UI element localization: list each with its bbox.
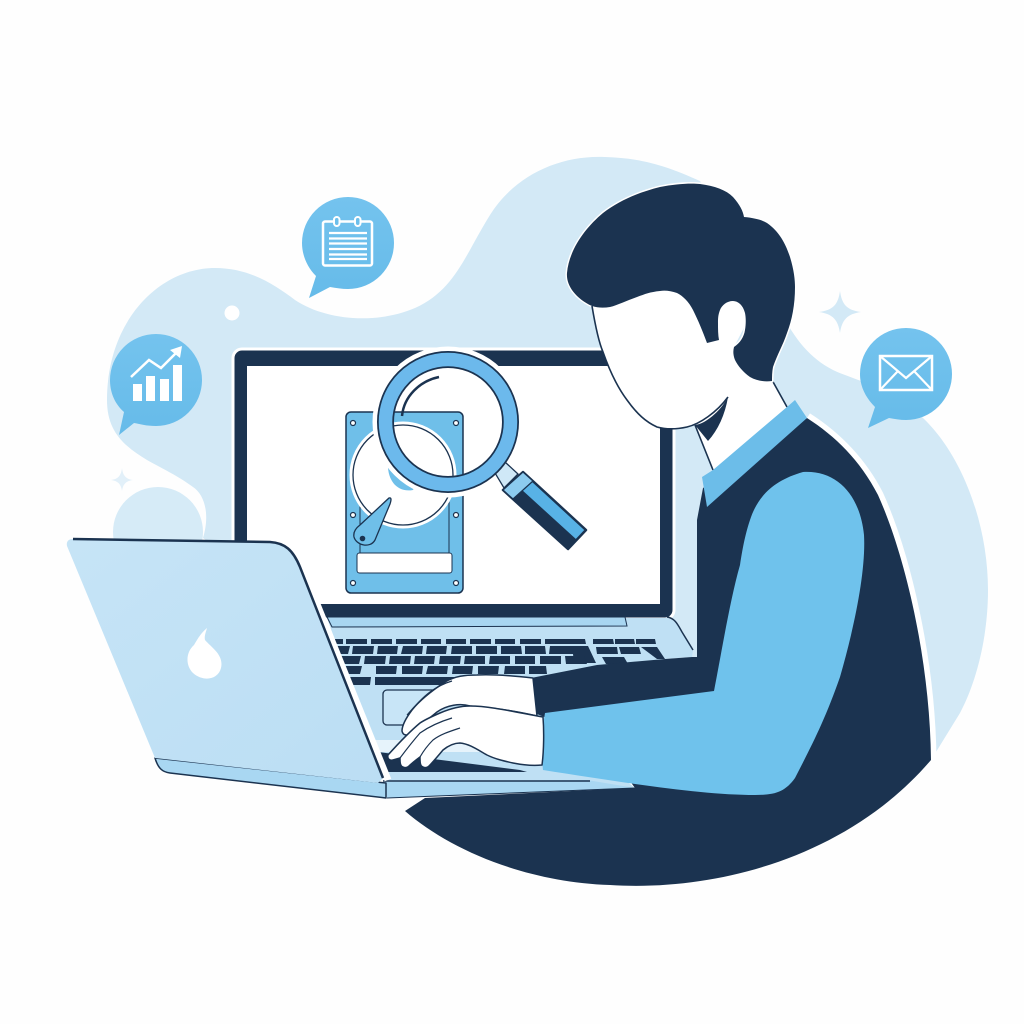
- laptop base and keyboard: [327, 617, 693, 798]
- face outline: [592, 306, 728, 429]
- hair: [567, 184, 795, 381]
- trackpad: [383, 690, 443, 725]
- person body and vest: [405, 418, 931, 886]
- magnifying glass: [375, 349, 586, 549]
- neck outlines: [695, 380, 787, 470]
- lid logo: [187, 628, 221, 679]
- hands: [388, 675, 544, 768]
- speech bubble: mail: [860, 328, 952, 428]
- keyboard keys: [334, 639, 665, 685]
- chin shadow: [695, 397, 728, 441]
- sparkle right: [819, 291, 861, 333]
- background blob: [107, 157, 988, 752]
- lower hand: [388, 706, 544, 768]
- decorative dot: [224, 306, 240, 320]
- upper hand: [402, 675, 537, 735]
- vest edge highlight: [807, 418, 931, 760]
- hard drive: [346, 412, 463, 593]
- collar: [702, 400, 807, 507]
- front edge: [385, 780, 635, 798]
- laptop screen: [233, 349, 674, 619]
- laptop lid: [67, 539, 388, 798]
- neck and face base: [592, 288, 787, 470]
- speech bubble: chart: [110, 334, 202, 435]
- speech bubble: calendar: [302, 197, 394, 298]
- gap between hands: [435, 703, 470, 714]
- sparkle left: [111, 468, 133, 491]
- sleeve: [542, 472, 864, 795]
